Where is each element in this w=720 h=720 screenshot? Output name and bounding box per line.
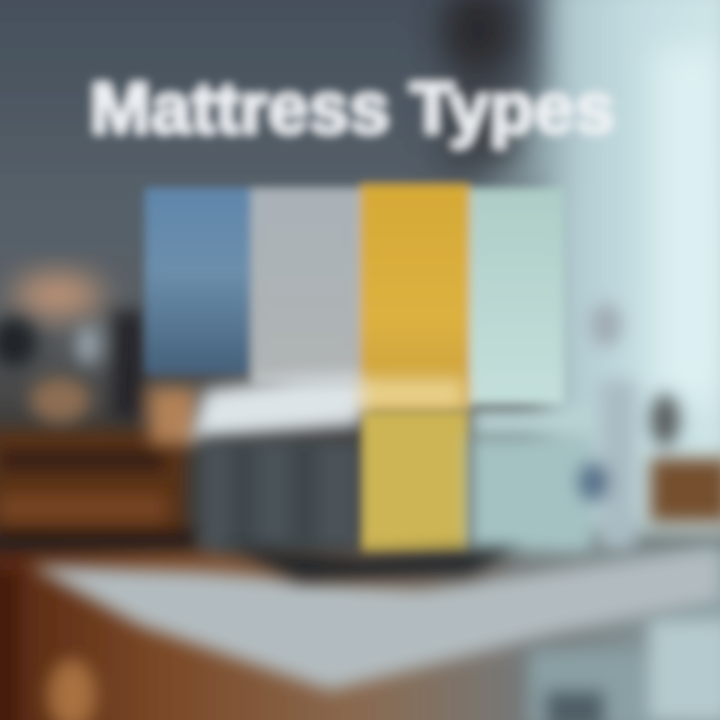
floor [0, 545, 720, 720]
panel: mattress type swatches [145, 184, 564, 410]
mattress front: yellow section [362, 412, 468, 552]
lamp and decor objects [0, 310, 196, 444]
mattress front: pale section [468, 435, 593, 553]
background: dark pendant shade [440, 0, 520, 170]
mattress front: dark section [200, 440, 362, 552]
mattress shadow base [225, 545, 520, 582]
title: Mattress Types [90, 69, 615, 149]
right bedside table [650, 394, 720, 522]
nightstand [0, 430, 200, 548]
rug [30, 548, 720, 690]
left bedside furniture [0, 275, 200, 548]
right side decor [578, 303, 720, 550]
panel: blue swatch [145, 188, 251, 374]
panel: grey swatch [251, 188, 360, 384]
vase [578, 303, 636, 550]
lamp glow [14, 275, 102, 315]
panel: mint swatch [470, 188, 564, 404]
background: window [490, 0, 720, 540]
mattress top [190, 376, 600, 440]
mattress [190, 376, 600, 582]
panel: yellow swatch [360, 184, 470, 410]
